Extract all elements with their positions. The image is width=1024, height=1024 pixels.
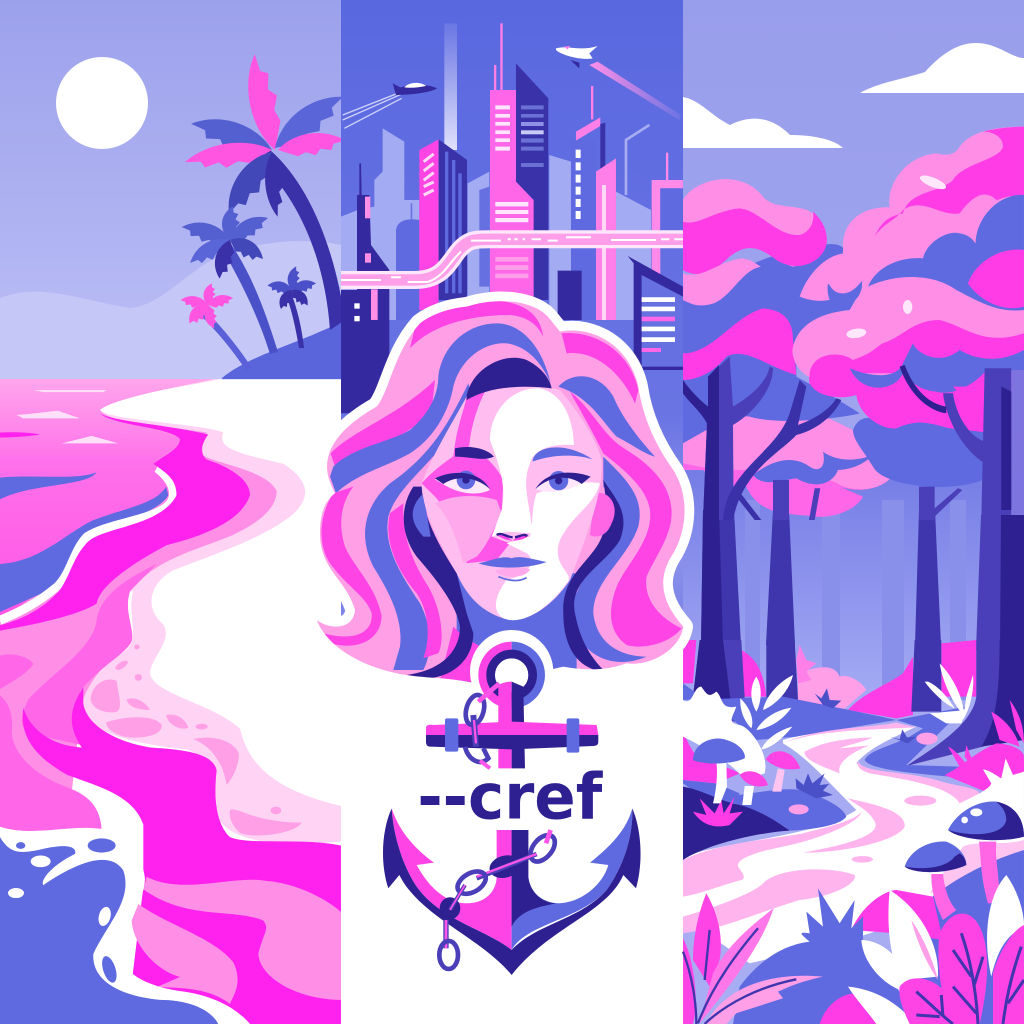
forest sky: [683, 0, 1024, 1024]
skyline: [341, 23, 683, 413]
nose: [496, 533, 528, 541]
ring: [470, 630, 553, 713]
panel: futuristic city: [341, 0, 683, 1024]
elevated road: [341, 237, 683, 282]
anchor flukes: [383, 808, 641, 975]
label: --cref: --cref: [417, 759, 604, 833]
tree canopies: [683, 127, 1024, 520]
sun: [56, 57, 148, 149]
panel: tropical beach: [0, 0, 351, 1024]
anchor stock and cross bar: [426, 682, 598, 768]
clouds: [860, 43, 1024, 93]
white lower panel: [341, 625, 683, 1024]
hills: [0, 241, 341, 380]
island: [222, 322, 341, 380]
sea and shoreline: [0, 379, 341, 1024]
eyes: [435, 471, 591, 493]
chain: [439, 683, 560, 969]
lips: [478, 557, 547, 568]
eyebrows: [455, 447, 494, 459]
sky: [0, 0, 341, 380]
hair outline: [317, 301, 685, 685]
forest floor with path, mushrooms and foliage: [683, 640, 1024, 1024]
panel: enchanted forest: [683, 0, 1024, 1024]
anchor emblem: [383, 630, 641, 975]
right trunk lower: [976, 515, 1024, 650]
plane right: [556, 46, 681, 120]
portrait of woman: [316, 292, 694, 682]
main trunks: [701, 510, 941, 645]
city background: [341, 0, 683, 690]
distant trunks: [745, 500, 966, 700]
distant haze: [683, 470, 1024, 710]
hair: [316, 301, 684, 682]
palm trees: [179, 51, 351, 370]
plane left: [343, 83, 437, 128]
ear: [590, 493, 615, 536]
face: [422, 358, 602, 620]
